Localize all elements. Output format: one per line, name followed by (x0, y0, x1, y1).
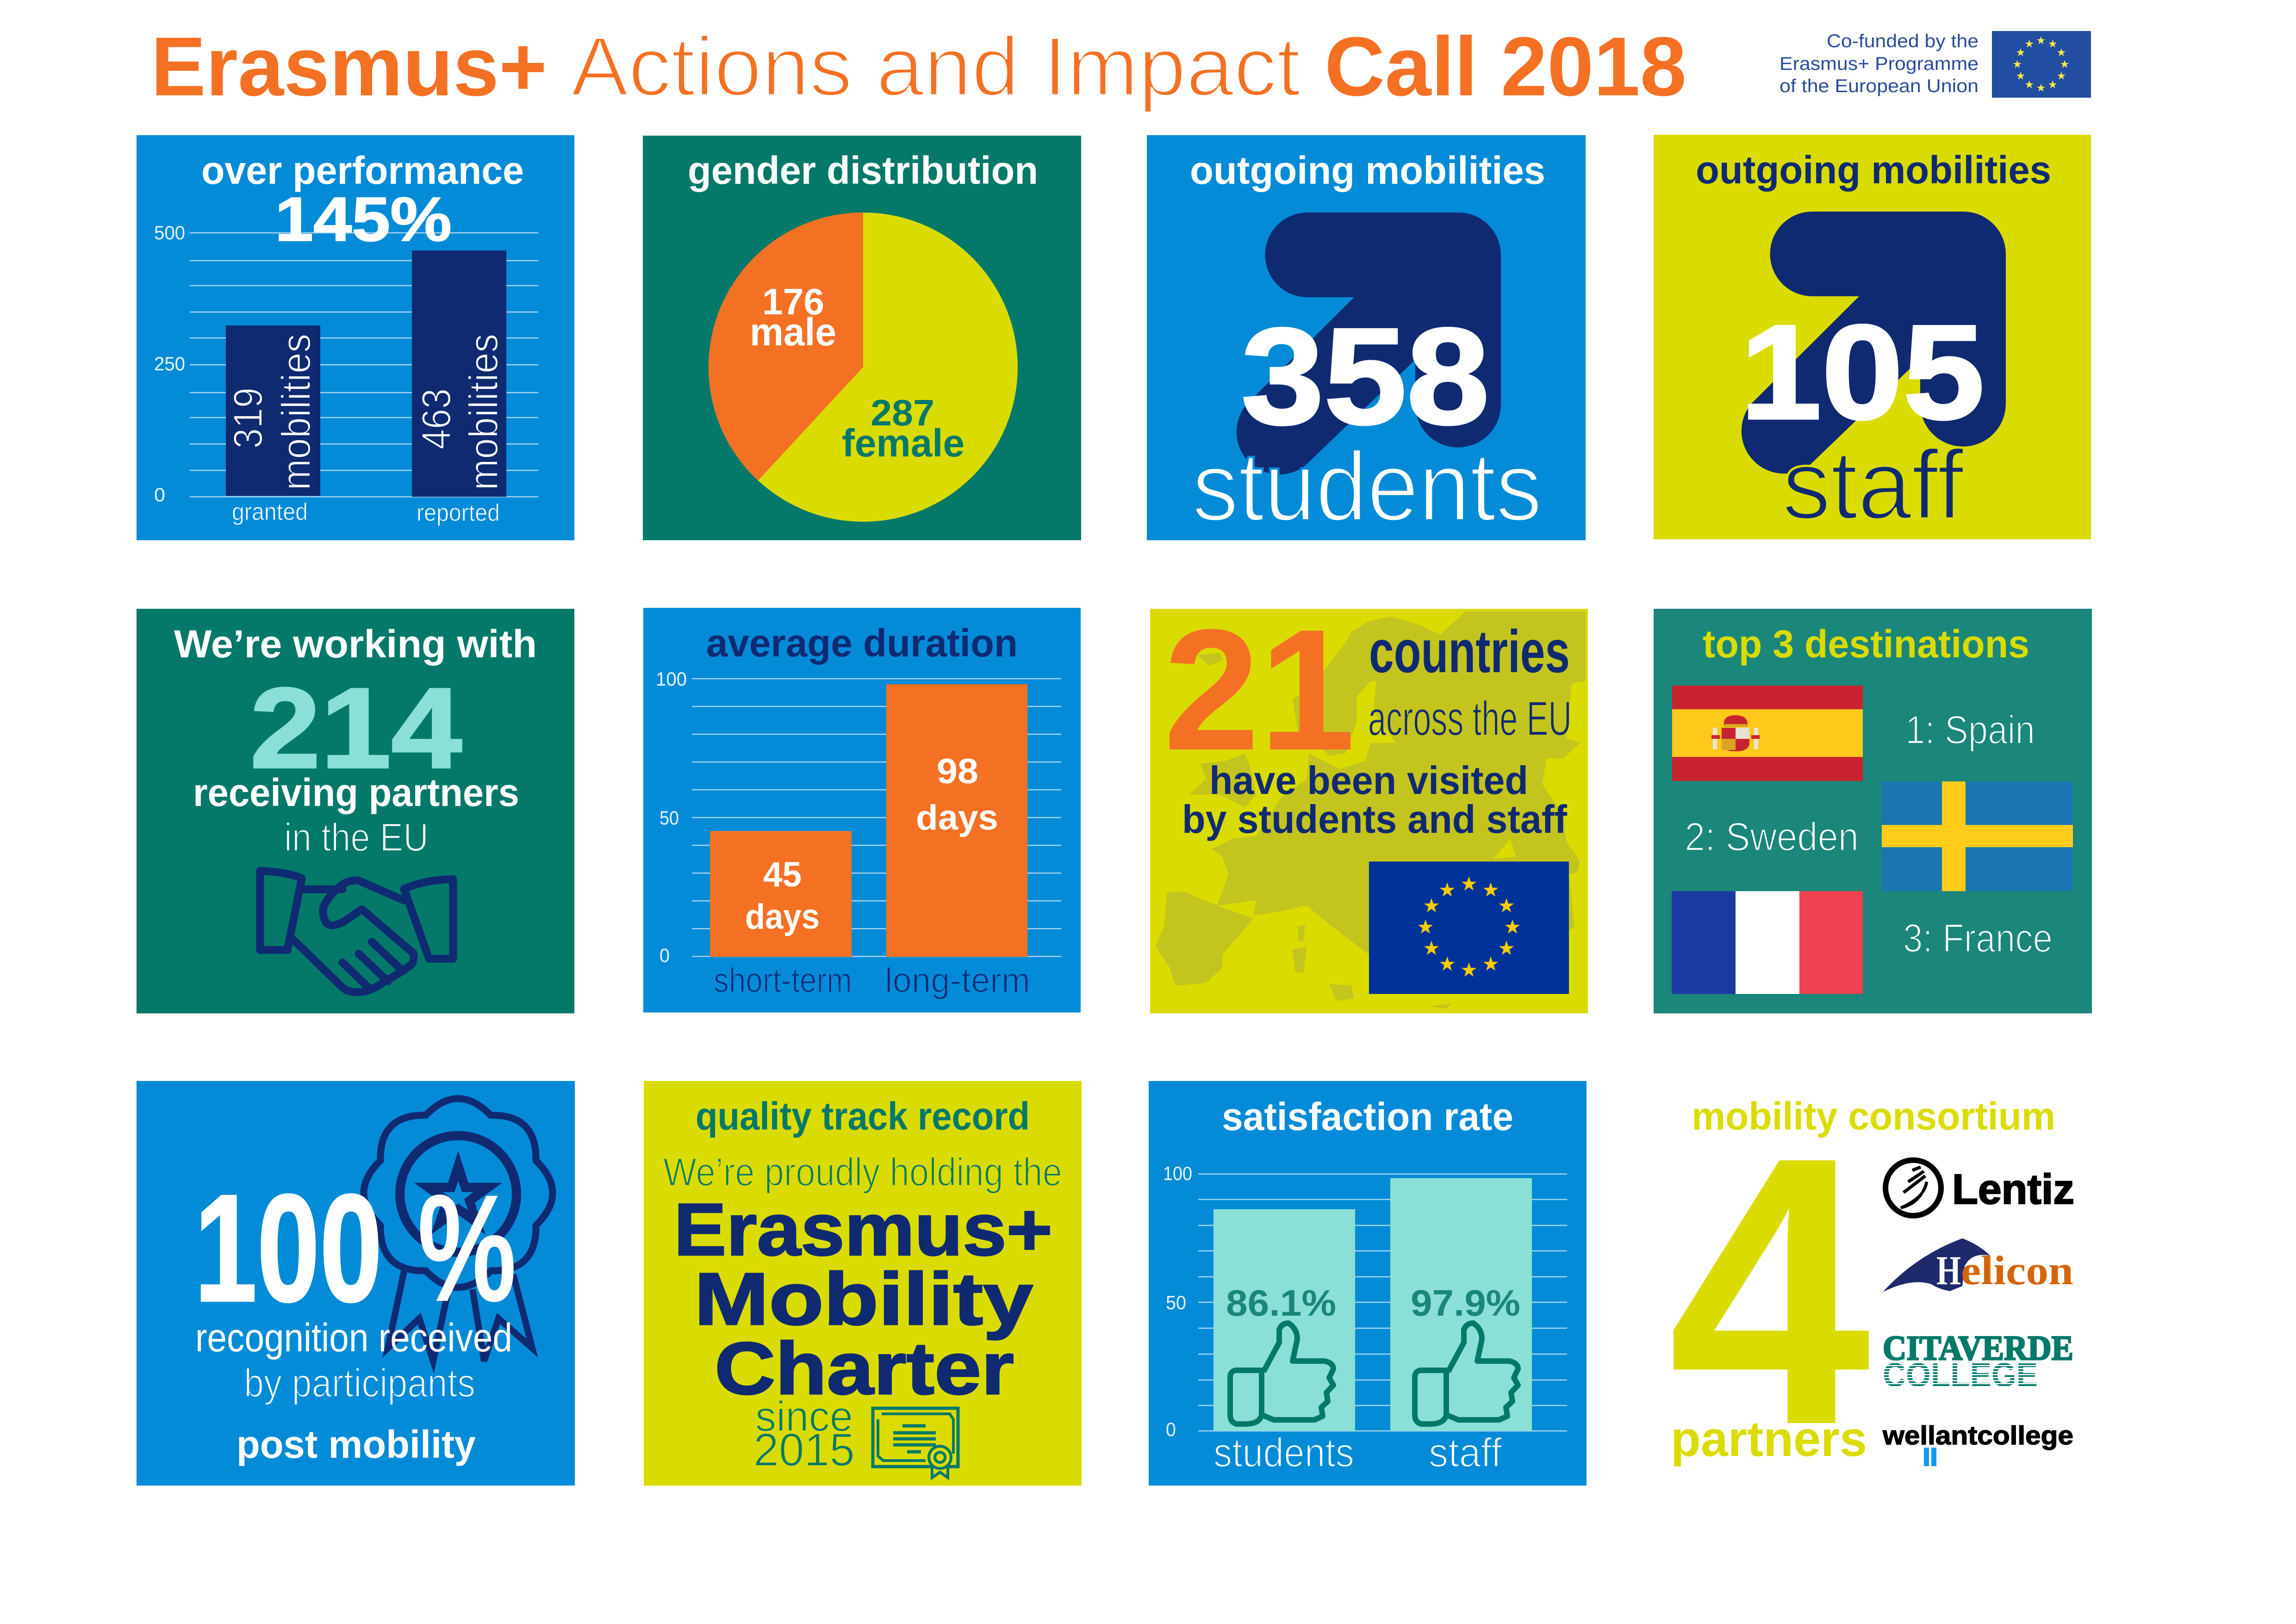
co-funded logo: Erasmus+ Programme (1780, 54, 1979, 74)
icon: handshake (260, 871, 453, 992)
big number 4: 4 (1668, 1077, 1873, 1504)
heading: outgoing mobilities (1696, 148, 2051, 192)
axis labels (154, 222, 185, 506)
bar labels: reported (417, 500, 500, 526)
axis labels (1163, 1162, 1192, 1440)
recognition text: recognition received (195, 1316, 512, 1360)
co-funded logo: of the European Union (1780, 76, 1979, 96)
recognition text (195, 1316, 512, 1405)
axis labels: 0 (1166, 1418, 1176, 1440)
bar labels (1213, 1430, 1502, 1475)
bar labels: granted (232, 499, 308, 525)
flag: France (1672, 891, 1863, 994)
panel: quality track record (644, 1081, 1082, 1486)
co-funded logo (1780, 31, 2091, 98)
since 2015: since (755, 1393, 853, 1440)
label: France: 3: France (1903, 916, 2053, 961)
number of partners: 214 (250, 664, 462, 792)
label: Sweden: 2: Sweden (1685, 815, 1859, 859)
heading: satisfaction rate (1222, 1095, 1513, 1138)
bar: granted (225, 325, 320, 496)
visited text (1182, 759, 1568, 842)
visited text: have been visited (1209, 759, 1528, 803)
icon: arrow (1742, 212, 2006, 474)
students label: students (1192, 431, 1542, 541)
panel: mobility consortium (1668, 1077, 2074, 1504)
since 2015 (753, 1393, 855, 1476)
heading: average duration (706, 621, 1018, 665)
heading: outgoing mobilities (1190, 149, 1545, 192)
panel: 21 countries (1150, 593, 1588, 1013)
bar: reported: 463 (413, 388, 459, 450)
charter name (674, 1188, 1052, 1410)
big percentage: 145% (275, 184, 452, 254)
bar: reported: mobilities (460, 334, 506, 490)
in the EU label: in the EU (284, 816, 429, 860)
icon: arrow (1237, 212, 1501, 475)
icon: certificate (873, 1408, 958, 1478)
visited text: by students and staff (1182, 798, 1568, 842)
pie chart: 176 (762, 281, 824, 322)
100 percent: 100 (194, 1162, 382, 1333)
intro line: We’re proudly holding the (663, 1150, 1062, 1194)
100 percent: % (417, 1162, 516, 1333)
axis labels (656, 668, 687, 966)
axis labels: 500 (154, 222, 185, 244)
bar: short-term: days (745, 897, 820, 937)
heading: We’re working with (174, 622, 537, 666)
axis labels: 50 (1166, 1292, 1186, 1313)
partners label: partners (1671, 1411, 1867, 1467)
bar labels: students (1213, 1430, 1354, 1475)
bar labels (714, 961, 1030, 999)
bar: granted: mobilities (273, 334, 319, 490)
panel: gender distribution (643, 136, 1081, 540)
heading: gender distribution (688, 149, 1038, 192)
pie chart: female (842, 421, 964, 465)
big number 21: 21 (1164, 593, 1355, 787)
panel: top 3 destinations (1654, 609, 2092, 1013)
icon: rosette (364, 1099, 553, 1361)
pie chart: male (750, 310, 836, 354)
heading: mobility consortium (1692, 1094, 2055, 1138)
map of Europe (1156, 612, 1586, 1009)
logo: Citaverde College: COLLEGE (1883, 1357, 2038, 1394)
across the EU label: across the EU (1368, 692, 1572, 746)
number of students: 358 (1241, 300, 1489, 453)
post mobility label: post mobility (236, 1423, 476, 1466)
logo: Lentiz (1885, 1160, 2074, 1216)
logo: Lentiz: Lentiz (1952, 1166, 2074, 1213)
flag: Sweden (1882, 781, 2073, 891)
axis labels: 0 (660, 944, 670, 966)
logo: Helicon (1883, 1238, 2073, 1293)
logo: Helicon: H (1936, 1248, 1961, 1293)
bar labels: short-term (714, 961, 852, 999)
bar labels: staff (1429, 1430, 1502, 1475)
recognition text: by participants (244, 1361, 475, 1405)
charter name: Erasmus+ (674, 1188, 1052, 1271)
countries label: countries (1369, 618, 1570, 685)
axis labels: 50 (660, 807, 679, 829)
axis labels: 250 (154, 353, 185, 375)
bar: short-term: 45 (763, 855, 802, 894)
bar labels (232, 499, 500, 526)
staff label: staff (1782, 430, 1964, 539)
logo: Wellant College (1882, 1421, 2073, 1466)
number of staff: 105 (1740, 297, 1985, 447)
charter name: Charter (715, 1327, 1014, 1410)
heading: quality track record (696, 1094, 1030, 1138)
logo: Helicon: elicon (1961, 1248, 2073, 1293)
bar: long-term (886, 684, 1027, 957)
bar: short-term (710, 831, 852, 957)
axis labels: 100 (656, 668, 687, 690)
panel: outgoing students (1147, 135, 1586, 541)
pie chart: 287 (871, 392, 934, 433)
logo: Citaverde College (1883, 1329, 2073, 1394)
panel: satisfaction rate (1149, 1081, 1587, 1486)
panel: recognition (137, 1081, 575, 1486)
panel: average duration (643, 608, 1081, 1012)
panel: outgoing staff (1654, 135, 2091, 539)
flag: Spain (1672, 686, 1863, 781)
charter name: Mobility (694, 1257, 1033, 1340)
bar: reported (412, 250, 506, 497)
EU flag (1369, 862, 1569, 994)
title (151, 20, 1686, 113)
bar: long-term: days (916, 798, 998, 837)
logo: Citaverde College: CITAVERDE (1883, 1329, 2073, 1368)
label: Spain: 1: Spain (1905, 708, 2035, 752)
title: Erasmus+ (151, 20, 547, 113)
panel: receiving partners (137, 609, 574, 1013)
pie chart (709, 212, 1018, 522)
title: Actions and Impact (571, 20, 1300, 113)
bar: long-term: 98 (937, 752, 978, 791)
bar: staff: 97.9% (1411, 1282, 1520, 1324)
axis labels: 100 (1163, 1162, 1192, 1184)
bar: granted: 319 (225, 387, 271, 449)
panel: over performance (137, 135, 574, 540)
bar: students (1213, 1209, 1355, 1431)
co-funded logo: Co-funded by the (1827, 31, 1979, 51)
logo: Wellant College: wellantcollege (1882, 1421, 2073, 1450)
heading: top 3 destinations (1703, 622, 2029, 666)
receiving partners label: receiving partners (193, 771, 519, 814)
title: Call 2018 (1325, 20, 1686, 113)
bar: staff (1390, 1178, 1532, 1431)
since 2015: 2015 (753, 1424, 855, 1476)
axis labels: 0 (154, 484, 165, 506)
bar: students: 86.1% (1226, 1282, 1336, 1324)
heading: over performance (201, 149, 524, 192)
bar labels: long-term (885, 961, 1030, 999)
